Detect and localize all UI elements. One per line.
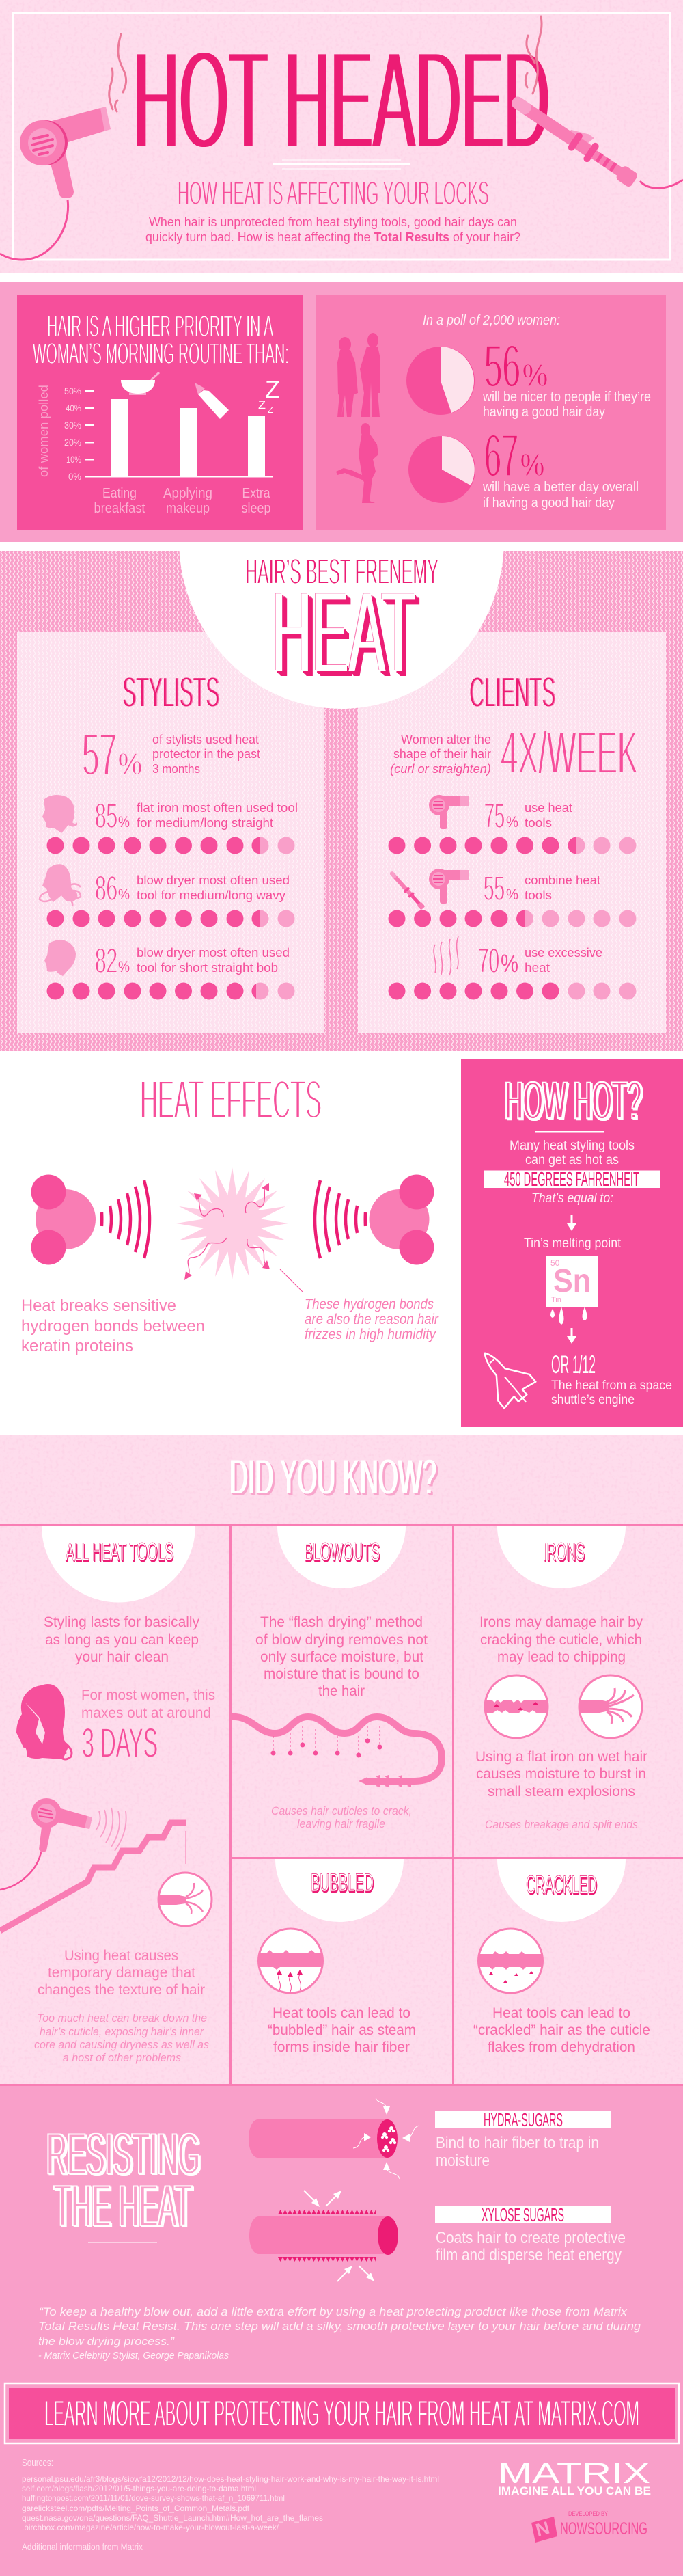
panel: morning routine band [0, 282, 683, 542]
panel: stylists: STYLISTS [122, 669, 219, 716]
stat 75%: % [506, 813, 518, 830]
xylose sugars text: film and disperse heat energy [436, 2246, 622, 2264]
temporary damage text: temporary damage that [48, 1965, 195, 1981]
bar chart: 20% [64, 437, 81, 448]
bubbled text [268, 2005, 416, 2055]
dots 86% [46, 910, 295, 927]
blowouts heading: BLOWOUTS [304, 1538, 380, 1566]
sources: quest.nasa.gov/qna/questions/FAQ_Shuttle_Launch.htm#How_hot_are_the_flames [22, 2513, 323, 2523]
stat 55%: tools [525, 889, 552, 902]
equal to text: That’s equal to: [531, 1191, 613, 1206]
blowouts note [271, 1804, 412, 1830]
icon: excessive heat steam [434, 936, 458, 975]
icon: space shuttle [469, 1340, 542, 1415]
stat text 56% [482, 390, 651, 420]
card: bubbled [258, 1869, 416, 2055]
3 days text: maxes out at around [81, 1705, 211, 1721]
icon: bubbled hair circle [258, 1929, 322, 1993]
text: HEAT [272, 567, 415, 698]
all heat tools heading: ALL HEAT TOOLS [66, 1538, 173, 1566]
did you know heading: DID YOU KNOW? [229, 1450, 436, 1505]
panel: how hot: OR 1/12 [551, 1351, 596, 1379]
stat 56%: % [522, 357, 548, 393]
dots 85% [46, 837, 295, 854]
stat 75%: use heat [525, 801, 572, 815]
stat 70% [478, 941, 602, 980]
diagram: xylose sugars fiber [249, 2191, 398, 2281]
dots 82% [46, 983, 295, 999]
chart heading: HAIR IS A HIGHER PRIORITY IN A [47, 310, 273, 343]
sources: garelicksteel.com/pdfs/Melting_Points_of_Common_Metals.pdf [22, 2504, 250, 2513]
icon: jumping woman silhouette [336, 423, 378, 503]
shuttle text: shuttle’s engine [551, 1393, 635, 1407]
blowouts text: the hair [318, 1683, 365, 1699]
icon: bob hair head [44, 940, 76, 976]
bubbled text: Heat tools can lead to [273, 2005, 410, 2021]
icon: heat waves [96, 1808, 126, 1851]
icon: sleep Zs [258, 375, 280, 415]
dryer cord [0, 200, 68, 260]
bar chart: breakfast [94, 501, 145, 516]
icon: small dryer 2 [429, 869, 469, 904]
stat 75% [484, 796, 572, 835]
card: all heat tools [0, 1538, 215, 2064]
heat breaks text: Heat breaks sensitive [21, 1297, 176, 1315]
dots 70% [388, 983, 637, 999]
stat 75%: 75 [484, 796, 505, 835]
bar chart: 10% [66, 454, 81, 465]
hydra-sugars text: Bind to hair fiber to trap in [436, 2134, 599, 2152]
stat 82%: 82 [95, 941, 117, 980]
stat 86%: % [118, 886, 130, 903]
hydra-sugars text: moisture [436, 2152, 490, 2170]
too much heat note: core and causing dryness as well as [34, 2038, 209, 2051]
bar chart: 0% [68, 471, 81, 482]
styling text: Styling lasts for basically [44, 1614, 199, 1630]
flat iron text: small steam explosions [488, 1784, 635, 1800]
how hot text: can get as hot as [525, 1153, 619, 1167]
stat 85%: % [118, 813, 130, 830]
panel: morning routine chart [17, 295, 303, 530]
heat breaks text: keratin proteins [21, 1337, 133, 1355]
blowouts text: moisture that is bound to [264, 1666, 419, 1682]
crackled text: “crackled” hair as the cuticle [473, 2022, 650, 2038]
sources: Additional information from Matrix [22, 2541, 143, 2552]
stat 55% [484, 869, 600, 908]
panel: resisting the heat: RESISTING [46, 2121, 200, 2187]
blowouts text [255, 1614, 428, 1699]
diagram: squiggle arrows [184, 1183, 270, 1280]
how hot text [510, 1139, 635, 1167]
matrix logo: MATRIX [498, 2457, 650, 2490]
icon: split ends circle [579, 1675, 642, 1738]
panel: how hot [461, 1059, 683, 1427]
blowouts note: Causes hair cuticles to crack, [271, 1804, 412, 1817]
hydrogen bonds note: frizzes in high humidity [305, 1327, 436, 1342]
bubbled heading: BUBBLED [311, 1869, 374, 1897]
bar chart: makeup [166, 501, 210, 516]
xylose sugars label: XYLOSE SUGARS [482, 2204, 564, 2225]
styling text: as long as you can keep [45, 1632, 199, 1648]
irons note: Causes breakage and split ends [485, 1818, 638, 1831]
resisting heading [46, 2121, 200, 2239]
blowouts note: leaving hair fragile [297, 1817, 385, 1830]
nowsourcing logo [531, 2510, 647, 2543]
stat 55%: combine heat [525, 873, 600, 887]
card: blowouts [232, 1538, 442, 1830]
hydra-sugars text [436, 2134, 599, 2170]
stat 70%: use excessive [525, 946, 602, 960]
diagram: hydra sugars fiber [249, 2098, 419, 2179]
crackled text: Heat tools can lead to [492, 2005, 630, 2021]
stat 67%: 67 [484, 421, 518, 489]
shuttle text: The heat from a space [551, 1379, 672, 1393]
stat 85%: 85 [95, 796, 117, 835]
bar chart: of women polled [37, 385, 51, 477]
hydrogen bonds note [305, 1297, 439, 1342]
icon: steam left [109, 34, 126, 111]
bubbled text: “bubbled” hair as steam [268, 2022, 416, 2038]
icon: split hair circle [158, 1873, 212, 1926]
hydra-sugars label: HYDRA-SUGARS [484, 2109, 563, 2130]
pie chart 67% [408, 436, 475, 503]
xylose sugars text [436, 2229, 626, 2264]
flat iron text: Using a flat iron on wet hair [475, 1749, 647, 1765]
icon: couple silhouette [337, 333, 380, 417]
sources: .birchbox.com/magazine/article/how-to-make-your-blowout-last-a-week/ [22, 2523, 279, 2532]
stat 57% [82, 722, 260, 788]
icon: crackled hair circle [478, 1929, 542, 1993]
stat 86%: tool for medium/long wavy [137, 889, 285, 902]
panel: stylists [40, 669, 298, 999]
card: irons [475, 1538, 647, 1831]
crackled text: flakes from dehydration [488, 2039, 635, 2055]
stat 82%: tool for short straight bob [137, 961, 278, 975]
hydra-sugars label [435, 2109, 611, 2130]
intro text: quickly turn bad. How is heat affecting the Total Results of your hair? [145, 230, 520, 244]
irons text: Irons may damage hair by [479, 1614, 643, 1630]
stat 85% [95, 796, 298, 835]
iron cord [640, 180, 683, 188]
pie chart 56% [406, 347, 475, 415]
quote: “To keep a healthy blow out, add a little extra effort by using a heat protecting product like those from Matrix [39, 2305, 628, 2318]
diagram: right protein [315, 1174, 434, 1264]
stat 86%: blow dryer most often used [137, 873, 290, 887]
stat 70%: 70 [478, 941, 499, 980]
stat 86% [95, 869, 290, 908]
blowouts text: The “flash drying” method [260, 1614, 423, 1630]
nowsourcing logo: DEVELOPED BY [568, 2510, 608, 2517]
stat 82%: % [118, 958, 130, 975]
diagram: left protein [31, 1174, 150, 1264]
bar chart: 30% [64, 420, 81, 431]
heat breaks text: hydrogen bonds between [21, 1317, 205, 1336]
stat 4x per week [390, 718, 638, 787]
icon: lipstick [195, 383, 229, 419]
stat 70%: heat [525, 961, 550, 975]
nowsourcing logo: N [533, 2517, 552, 2540]
stat 4x per week: Women alter the [401, 733, 491, 746]
bar chart: sleep [242, 501, 270, 516]
crackled text [473, 2005, 650, 2055]
bar chart: 40% [66, 403, 81, 413]
quote: - Matrix Celebrity Stylist, George Papanikolas [38, 2350, 229, 2361]
banner [5, 2383, 679, 2443]
diagram: starburst broken bond [176, 1167, 288, 1279]
stat 82% [95, 941, 290, 980]
quote: the blow drying process.” [38, 2335, 175, 2348]
too much heat note: Too much heat can break down the [37, 2011, 207, 2024]
sources [22, 2457, 439, 2552]
bubbled text: forms inside hair fiber [273, 2039, 410, 2055]
arrow down [567, 1215, 576, 1231]
poll heading: In a poll of 2,000 women: [423, 313, 560, 328]
icon: damaged hair staircase [0, 1823, 186, 1931]
sources: self.com/blogs/flash/2012/01/5-things-you-are-doing-to-dama.html [22, 2484, 256, 2493]
bar chart [37, 385, 273, 516]
stat 70%: % [501, 949, 518, 977]
panel: clients [388, 669, 638, 999]
intro text [145, 215, 520, 244]
stat text 56%: having a good hair day [483, 405, 605, 420]
stat text 67% [482, 480, 639, 511]
icon: tin element: Sn [553, 1263, 591, 1299]
shuttle text [551, 1379, 672, 1407]
icon: short curled hair head [42, 795, 77, 833]
how hot text: Many heat styling tools [510, 1139, 635, 1153]
panel: header [0, 0, 683, 273]
3 days text [81, 1687, 215, 1766]
panel: did you know [0, 1435, 683, 2086]
temporary damage text: Using heat causes [64, 1948, 178, 1964]
callout line [280, 1269, 303, 1292]
stat 85%: for medium/long straight [137, 816, 273, 830]
icon: small curling iron [388, 870, 426, 910]
icon: small dryer [429, 795, 469, 829]
intro text: When hair is unprotected from heat styling tools, good hair days can [149, 215, 517, 229]
grid lines [0, 1524, 683, 2086]
irons heading: IRONS [543, 1538, 585, 1566]
stat text 67%: will have a better day overall [482, 480, 639, 495]
styling text: your hair clean [75, 1649, 169, 1665]
too much heat note [34, 2011, 209, 2064]
icon: wavy hair head [40, 864, 81, 906]
stat 57%: 3 months [152, 762, 200, 776]
bar chart: 50% [64, 385, 81, 396]
irons text: cracking the cuticle, which [480, 1632, 642, 1648]
styling text [44, 1614, 199, 1665]
tin text: Tin’s melting point [524, 1236, 622, 1251]
stat 82%: blow dryer most often used [137, 946, 290, 960]
icon: cracked hair circle [485, 1675, 548, 1738]
stat 4x per week: (curl or straighten) [390, 762, 491, 776]
too much heat note: a host of other problems [63, 2051, 181, 2064]
icon: hair dryer [0, 107, 111, 260]
stat 56%: 56 [484, 331, 520, 400]
card: crackled [473, 1871, 650, 2055]
panel: morning routine chart: WOMAN’S MORNING ROUTINE THAN: [33, 337, 289, 370]
icon: tin element: Tin [551, 1296, 561, 1304]
stat 57%: of stylists used heat [152, 733, 259, 746]
sources: huffingtonpost.com/2011/11/01/dove-survey-shows-that-af_n_1069711.html [22, 2493, 285, 2503]
flat iron text [475, 1749, 647, 1800]
bar chart: Eating [102, 486, 137, 501]
icon: steam right [525, 16, 542, 94]
bar chart: Applying [163, 486, 212, 501]
flat iron text: causes moisture to burst in [476, 1766, 646, 1782]
heat breaks text [21, 1297, 205, 1355]
stat text 56%: will be nicer to people if they’re [482, 390, 651, 405]
divider lines [273, 160, 410, 170]
stat 55%: % [506, 886, 518, 903]
icon: sleep Zs: Z [268, 405, 273, 415]
chart heading [33, 310, 289, 370]
irons text [479, 1614, 643, 1665]
panel: resisting the heat [0, 2086, 683, 2576]
tab shapes [42, 1526, 626, 1922]
icon: tin element [546, 1256, 598, 1325]
header frame [13, 13, 670, 260]
too much heat note: hair’s cuticle, exposing hair’s inner [40, 2025, 204, 2038]
dots 55% [388, 910, 637, 927]
resisting heading: THE HEAT [54, 2173, 192, 2239]
stat 4x per week: shape of their hair [393, 747, 491, 761]
text: HAIR’S BEST FRENEMY [245, 552, 438, 592]
icon: dryer small [0, 1798, 92, 1890]
matrix logo: IMAGINE ALL YOU CAN BE [498, 2484, 651, 2497]
stat 75%: tools [525, 816, 552, 830]
stat 57%: % [118, 746, 142, 781]
xylose sugars label [435, 2204, 611, 2225]
arrow down [567, 1328, 576, 1344]
stat 86%: 86 [95, 869, 117, 908]
hydrogen bonds note: These hydrogen bonds [305, 1297, 434, 1312]
stat 57%: protector in the past [152, 747, 260, 761]
icon: curling iron [507, 88, 642, 191]
hydrogen bonds note: are also the reason hair [305, 1312, 439, 1327]
sources: Sources: [22, 2457, 53, 2469]
dots 75% [388, 837, 637, 854]
icon: long hair [16, 1684, 72, 1759]
3 days text: For most women, this [81, 1687, 215, 1703]
icon: tin element: 50 [550, 1258, 560, 1268]
panel: heat effects [21, 1069, 439, 1355]
icon: sleep Zs: Z [258, 398, 266, 411]
sources: personal.psu.edu/afr3/blogs/siowfa12/2012/12/how-does-heat-styling-hair-work-and-why-is-my-hair-the-way-it-is.html [22, 2474, 439, 2484]
panel: heat effects: HEAT EFFECTS [140, 1069, 322, 1130]
icon: sleep Zs: Z [265, 375, 280, 403]
panel: poll [316, 295, 666, 530]
quote: Total Results Heat Resist. This one step will add a silky, smooth protective layer to your hair before and during [38, 2320, 641, 2333]
stat 55%: 55 [484, 869, 505, 908]
stat 67%: % [520, 446, 544, 483]
icon: wavy hair strand [232, 1717, 442, 1787]
3 days text: 3 DAYS [82, 1720, 158, 1766]
icon: cereal bowl [121, 372, 159, 395]
blowouts text: only surface moisture, but [260, 1649, 423, 1665]
irons text: may lead to chipping [497, 1649, 626, 1665]
quote [38, 2305, 641, 2361]
stat 85%: flat iron most often used tool [137, 801, 298, 815]
crackled heading: CRACKLED [526, 1871, 597, 1899]
panel: heat frenemy background [0, 371, 683, 1051]
temporary damage text [38, 1948, 205, 1998]
matrix logo [498, 2457, 651, 2497]
bar chart: Extra [242, 486, 270, 501]
xylose sugars text: Coats hair to create protective [436, 2229, 626, 2247]
stat 57%: 57 [82, 722, 117, 788]
blowouts text: of blow drying removes not [255, 1632, 428, 1648]
temporary damage text: changes the texture of hair [38, 1982, 205, 1998]
stat text 67%: if having a good hair day [483, 496, 615, 511]
panel: clients: CLIENTS [469, 669, 555, 716]
